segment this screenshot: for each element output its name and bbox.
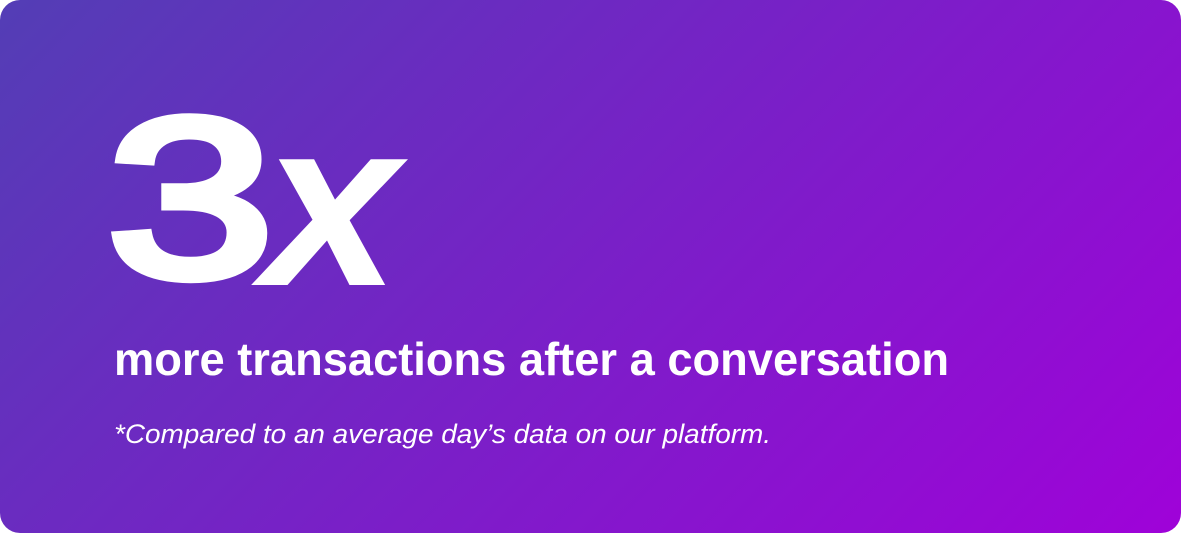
footnote: *Compared to an average day’s data on our platform. [114,419,771,449]
letter x: x [251,70,409,336]
big number: 3x [107,70,409,336]
digit 3: 3 [107,73,274,325]
heading: more transactions after a conversation: more transactions after a conversation [114,333,949,385]
